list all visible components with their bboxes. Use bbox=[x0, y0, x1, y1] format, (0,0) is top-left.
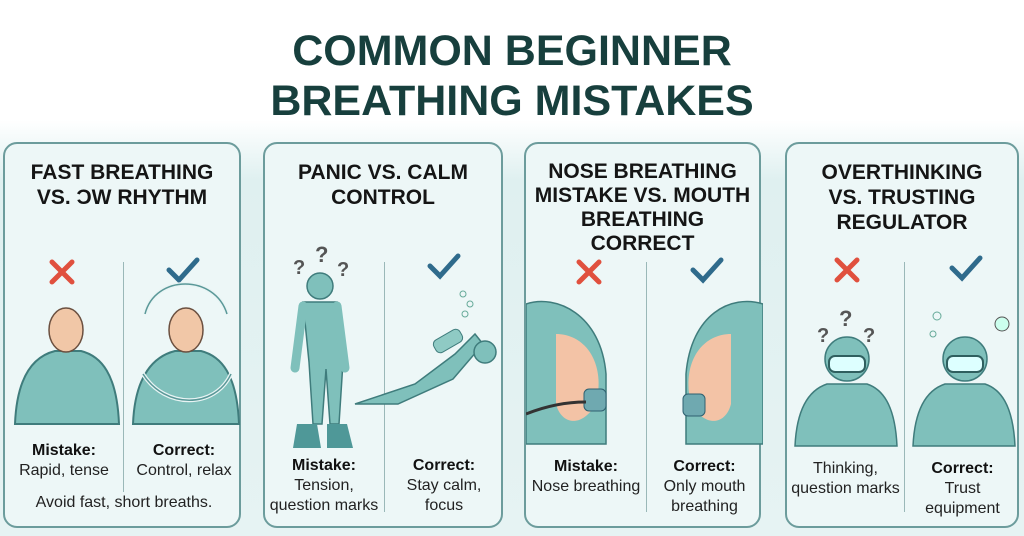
labels: Rapid, tense bbox=[19, 462, 109, 479]
labels: question marks bbox=[270, 497, 378, 514]
panel: fast breathing: Control, relax bbox=[136, 462, 232, 479]
labels bbox=[19, 442, 109, 479]
heading: NOSE BREATHING bbox=[548, 160, 737, 183]
heading: FAST BREATHING bbox=[31, 161, 213, 184]
labels bbox=[791, 460, 900, 497]
panel: panic vs calm: focus bbox=[425, 497, 463, 514]
heading: OVERTHINKING bbox=[821, 161, 982, 184]
illustration bbox=[290, 242, 497, 448]
illustration: ? bbox=[817, 325, 829, 347]
title: COMMON BEGINNER bbox=[292, 27, 732, 75]
panel: panic vs calm bbox=[263, 142, 503, 528]
heading: VS. ƆW RHYTHM bbox=[37, 186, 207, 209]
labels bbox=[270, 457, 378, 514]
heading: BREATHING bbox=[581, 208, 704, 231]
labels: Mistake: bbox=[554, 458, 618, 475]
illustration: ? bbox=[839, 306, 852, 331]
labels: question marks bbox=[791, 480, 900, 497]
panel: fast breathing: Avoid fast, short breaths. bbox=[36, 494, 212, 511]
labels: Nose breathing bbox=[532, 478, 640, 495]
panel: overthinking vs trusting: Trust bbox=[945, 480, 980, 497]
illustration bbox=[14, 258, 240, 425]
labels: Mistake: bbox=[32, 442, 96, 459]
heading: VS. TRUSTING bbox=[828, 186, 976, 209]
illustration bbox=[526, 258, 763, 445]
heading: CONTROL bbox=[331, 186, 435, 209]
heading: CORRECT bbox=[591, 232, 694, 255]
panel: overthinking vs trusting: Correct: bbox=[931, 460, 994, 477]
heading: REGULATOR bbox=[836, 211, 968, 234]
panel: nose vs mouth bbox=[524, 142, 761, 528]
illustration: ? bbox=[863, 325, 875, 347]
labels: Thinking, bbox=[813, 460, 878, 477]
panel: nose vs mouth: Only mouth bbox=[664, 478, 745, 495]
labels bbox=[532, 458, 640, 495]
heading bbox=[298, 161, 468, 209]
panel: fast breathing bbox=[3, 142, 241, 528]
illustration: ? bbox=[315, 242, 328, 267]
labels: Tension, bbox=[294, 477, 354, 494]
illustration bbox=[794, 256, 1016, 447]
panel: nose vs mouth: Correct: bbox=[673, 458, 736, 475]
panel: panic vs calm: Correct: bbox=[413, 457, 475, 474]
panel: panic vs calm: Stay calm, bbox=[407, 477, 481, 494]
heading: PANIC VS. CALM bbox=[298, 161, 468, 184]
heading: MISTAKE VS. MOUTH bbox=[535, 184, 750, 207]
illustration: ? bbox=[337, 259, 349, 281]
panel: overthinking vs trusting bbox=[785, 142, 1019, 528]
panel: fast breathing: Correct: bbox=[153, 442, 215, 459]
illustration: ? bbox=[293, 257, 305, 279]
panel: overthinking vs trusting: equipment bbox=[925, 500, 1000, 517]
heading bbox=[31, 161, 213, 209]
title: BREATHING MISTAKES bbox=[270, 77, 754, 125]
labels: Mistake: bbox=[292, 457, 356, 474]
heading bbox=[821, 161, 982, 234]
title bbox=[270, 27, 754, 125]
heading bbox=[535, 160, 750, 255]
panel: nose vs mouth: breathing bbox=[671, 498, 738, 515]
